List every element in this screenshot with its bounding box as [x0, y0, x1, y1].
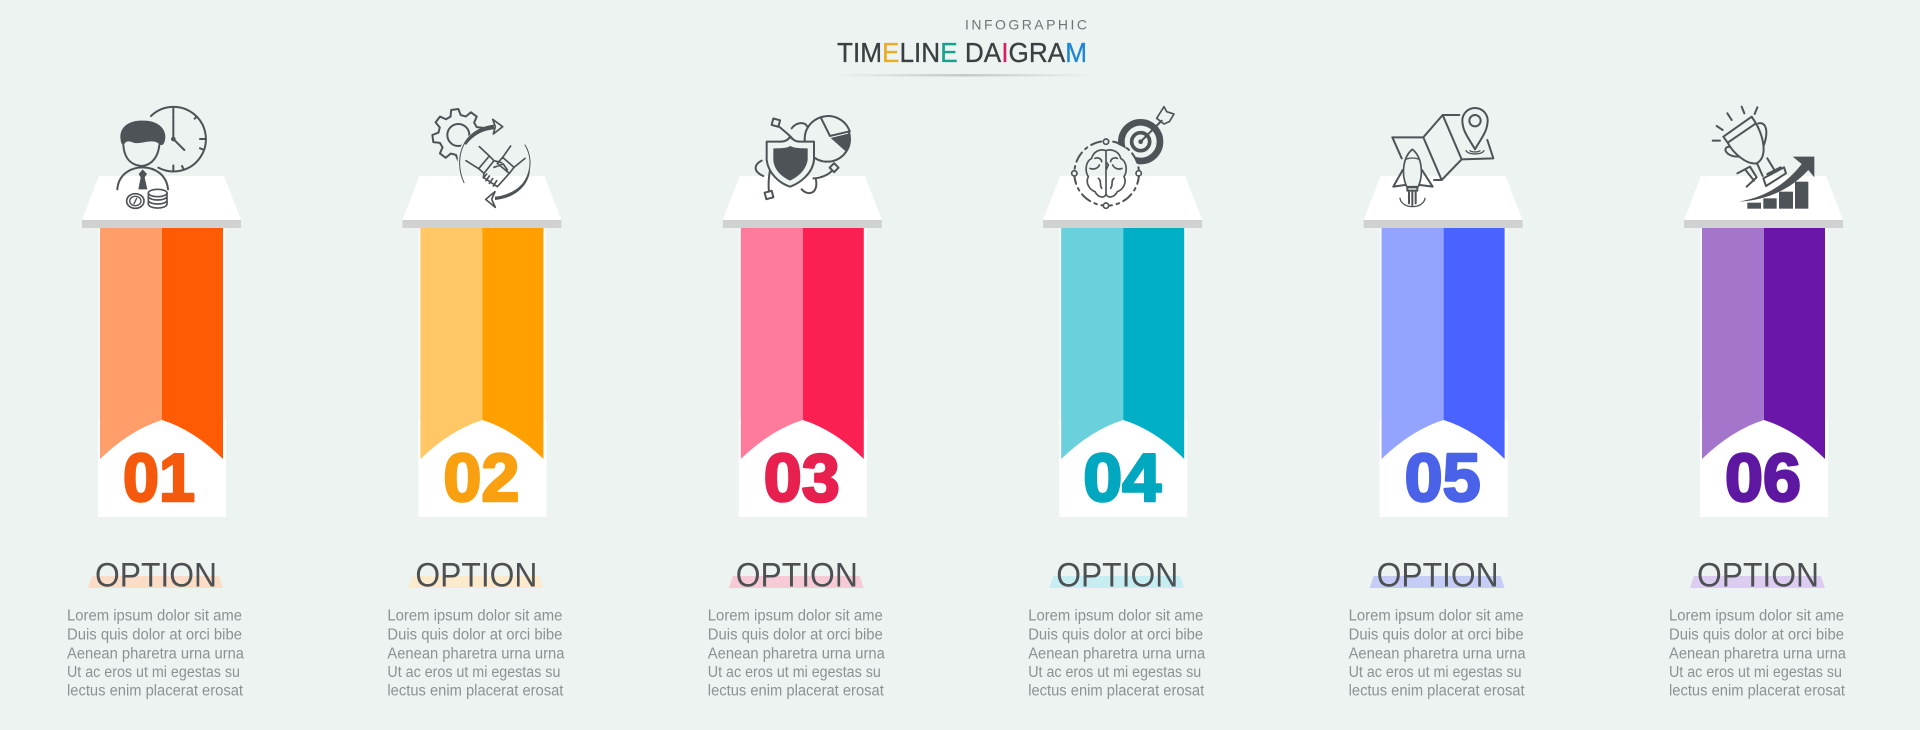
option highlight [408, 576, 543, 588]
body text: lectus enim placerat erosat [387, 683, 564, 700]
heading: timeline daigram: TIMELINE DAIGRAM [837, 37, 1087, 68]
option highlight [1049, 576, 1184, 588]
option heading: OPTION [1056, 556, 1178, 594]
ribbon light half [420, 228, 482, 459]
body text: lectus enim placerat erosat [1349, 683, 1525, 700]
white base [739, 420, 867, 517]
pedestal top [1364, 176, 1523, 220]
base halo [98, 228, 226, 460]
panel: option 04 [1028, 176, 1206, 700]
pedestal edge [402, 220, 561, 228]
number: 02 [443, 440, 519, 516]
white base [1700, 420, 1828, 517]
ribbon dark half [162, 228, 223, 459]
body text: Ut ac eros ut mi egestas su [708, 664, 881, 681]
ribbon light half [1702, 228, 1764, 459]
pedestal top [1684, 176, 1843, 220]
ribbon light half [741, 228, 803, 459]
body text: Ut ac eros ut mi egestas su [1349, 664, 1522, 681]
ribbon light half [100, 228, 162, 459]
icon: rocket and map pin [1392, 108, 1493, 207]
option highlight [729, 576, 864, 588]
option heading: OPTION [1697, 556, 1819, 594]
body text: Duis quis dolor at orci bibe [387, 626, 562, 644]
pedestal top [1043, 176, 1202, 220]
base halo [418, 228, 546, 460]
body text [387, 608, 565, 700]
icon: shield with pie chart [756, 116, 850, 199]
body text: lectus enim placerat erosat [1669, 683, 1846, 700]
icon: target and brain [1072, 107, 1174, 208]
icon: trophy and growth chart [1713, 107, 1814, 209]
ribbon light half [1061, 228, 1123, 459]
option heading: OPTION [1377, 556, 1499, 594]
panel: option 02 [387, 176, 565, 700]
body text: Aenean pharetra urna urna [1669, 645, 1846, 662]
pedestal edge [1043, 220, 1202, 228]
pedestal edge [723, 220, 882, 228]
body text: Ut ac eros ut mi egestas su [1028, 664, 1201, 681]
number: 06 [1725, 440, 1801, 516]
body text: Duis quis dolor at orci bibe [708, 626, 883, 644]
body text [1669, 608, 1846, 700]
subtitle: infographic: INFOGRAPHIC [965, 16, 1087, 32]
icon: gear and handshake [432, 109, 530, 207]
panel: option 03 [708, 176, 885, 700]
panel: option 01 [67, 176, 244, 700]
pedestal top [82, 176, 241, 220]
ribbon dark half [1444, 228, 1505, 459]
body text: Ut ac eros ut mi egestas su [1669, 664, 1842, 681]
body text: Aenean pharetra urna urna [67, 645, 244, 662]
icon: businessman with clock and coins [117, 107, 206, 208]
base halo [1059, 228, 1187, 460]
title underline shadow [832, 74, 1096, 76]
body text: Ut ac eros ut mi egestas su [67, 664, 240, 681]
ribbon dark half [803, 228, 864, 459]
body text [1349, 608, 1526, 700]
option heading: OPTION [736, 556, 858, 594]
body text: Aenean pharetra urna urna [387, 645, 565, 662]
number: 04 [1083, 440, 1161, 516]
ribbon dark half [1123, 228, 1184, 459]
ribbon dark half [1764, 228, 1825, 459]
body text: lectus enim placerat erosat [708, 683, 884, 700]
number: 03 [764, 440, 840, 516]
body text: Lorem ipsum dolor sit ame [67, 608, 242, 625]
body text: Lorem ipsum dolor sit ame [708, 608, 883, 625]
base halo [1700, 228, 1828, 460]
body text [67, 608, 244, 700]
pedestal top [723, 176, 882, 220]
number: 01 [123, 440, 195, 516]
body text: Lorem ipsum dolor sit ame [1669, 608, 1844, 625]
white base [418, 420, 546, 517]
option heading: OPTION [95, 556, 217, 594]
body text: lectus enim placerat erosat [67, 683, 244, 700]
body text: Aenean pharetra urna urna [708, 645, 885, 662]
body text: Lorem ipsum dolor sit ame [387, 608, 562, 625]
option highlight [1690, 576, 1825, 588]
option heading: OPTION [415, 556, 537, 594]
body text: Lorem ipsum dolor sit ame [1028, 608, 1203, 625]
base halo [739, 228, 867, 460]
body text: Duis quis dolor at orci bibe [1669, 626, 1844, 644]
ribbon dark half [482, 228, 543, 459]
body text: Duis quis dolor at orci bibe [1028, 626, 1203, 644]
body text: Ut ac eros ut mi egestas su [387, 664, 560, 681]
title [832, 16, 1096, 76]
option highlight [1370, 576, 1505, 588]
ribbon light half [1382, 228, 1444, 459]
white base [1380, 420, 1508, 517]
body text: Lorem ipsum dolor sit ame [1349, 608, 1524, 625]
option highlight [88, 576, 223, 588]
body text: Duis quis dolor at orci bibe [67, 626, 242, 644]
body text: Aenean pharetra urna urna [1028, 645, 1206, 662]
white base [98, 420, 226, 517]
body text [708, 608, 885, 700]
pedestal edge [1364, 220, 1523, 228]
pedestal edge [82, 220, 241, 228]
body text: Duis quis dolor at orci bibe [1349, 626, 1524, 644]
panel: option 06 [1669, 176, 1846, 700]
body text: lectus enim placerat erosat [1028, 683, 1205, 700]
panel: option 05 [1349, 176, 1526, 700]
number: 05 [1405, 440, 1481, 516]
pedestal top [402, 176, 561, 220]
white base [1059, 420, 1187, 517]
base halo [1380, 228, 1508, 460]
pedestal edge [1684, 220, 1843, 228]
body text: Aenean pharetra urna urna [1349, 645, 1526, 662]
body text [1028, 608, 1206, 700]
